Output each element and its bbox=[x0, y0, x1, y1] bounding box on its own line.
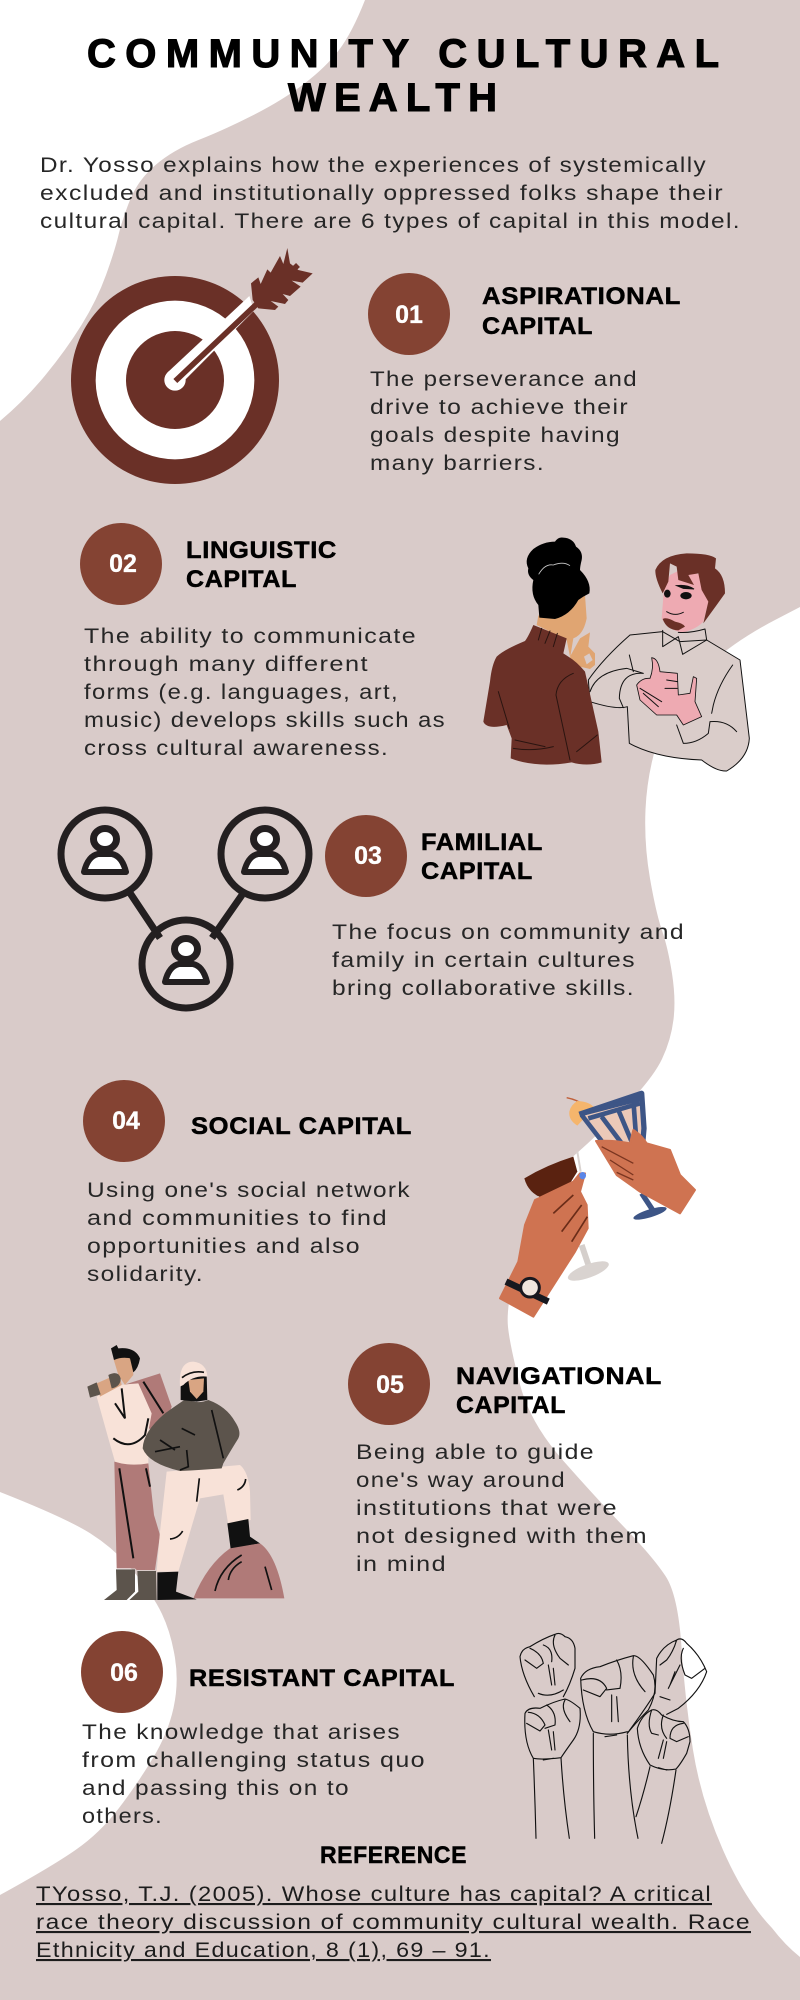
number badge 01 bbox=[368, 273, 450, 355]
heading 04: SOCIAL CAPITAL bbox=[191, 1113, 412, 1140]
number badge 06: 06 bbox=[110, 1659, 138, 1687]
heading 03: FAMILIAL bbox=[421, 829, 543, 856]
number badge 05: 05 bbox=[376, 1371, 404, 1399]
intro text block: cultural capital. There are 6 types of capital in this model. bbox=[40, 210, 741, 233]
section 06: resistant capital bbox=[81, 1631, 455, 1828]
illustration: hands toasting glasses bbox=[500, 1093, 695, 1317]
person icon left bbox=[84, 828, 126, 872]
body text 05: one's way around bbox=[356, 1469, 566, 1492]
body text 03: family in certain cultures bbox=[332, 949, 636, 972]
title: COMMUNITY CULTURAL bbox=[87, 32, 719, 76]
body text 01: goals despite having bbox=[370, 424, 621, 447]
body text 01: many barriers. bbox=[370, 452, 545, 475]
body text 04: and communities to find bbox=[87, 1207, 388, 1230]
intro text block: Dr. Yosso explains how the experiences of systemically bbox=[40, 154, 707, 177]
heading 01 bbox=[482, 283, 681, 340]
body text 04: Using one's social network bbox=[87, 1179, 411, 1202]
body text 04: solidarity. bbox=[87, 1263, 204, 1286]
body text 04 bbox=[87, 1179, 411, 1286]
person icon right bbox=[244, 828, 286, 872]
intro text block: excluded and institutionally oppressed folks shape their bbox=[40, 182, 724, 205]
number badge 05 bbox=[348, 1343, 430, 1425]
reference citation bbox=[36, 1883, 751, 1962]
heading 03 bbox=[421, 829, 543, 885]
illustration: two hikers bbox=[87, 1345, 284, 1600]
icon: connected people network bbox=[61, 810, 309, 1008]
heading 02: LINGUISTIC bbox=[186, 537, 337, 564]
person icon bottom bbox=[165, 938, 207, 982]
heading 05: NAVIGATIONAL bbox=[456, 1363, 662, 1390]
number badge 02: 02 bbox=[109, 550, 137, 578]
body text 06: from challenging status quo bbox=[82, 1749, 426, 1772]
number badge 03 bbox=[325, 815, 407, 897]
body text 02: music) develops skills such as bbox=[84, 709, 446, 732]
heading 01: CAPITAL bbox=[482, 313, 593, 340]
reference citation: race theory discussion of community cultural wealth. Race bbox=[36, 1911, 751, 1934]
body text 02: forms (e.g. languages, art, bbox=[84, 681, 399, 704]
body text 06: and passing this on to bbox=[82, 1777, 350, 1800]
heading 05 bbox=[456, 1363, 662, 1419]
title bbox=[87, 32, 719, 120]
body text 05: in mind bbox=[356, 1553, 447, 1576]
number badge 06 bbox=[81, 1631, 163, 1713]
section 03: familial capital bbox=[325, 815, 685, 1000]
body text 01 bbox=[370, 368, 638, 475]
number badge 02 bbox=[80, 523, 162, 605]
body text 01: The perseverance and bbox=[370, 368, 638, 391]
number badge 04: 04 bbox=[112, 1107, 140, 1135]
number badge 01: 01 bbox=[395, 301, 423, 329]
illustration: two people talking bbox=[483, 537, 749, 771]
body text 05: Being able to guide bbox=[356, 1441, 595, 1464]
reference citation: TYosso, T.J. (2005). Whose culture has capital? A critical bbox=[36, 1883, 712, 1906]
number badge 04 bbox=[83, 1080, 165, 1162]
section 05: navigational capital bbox=[348, 1343, 662, 1576]
body text 03 bbox=[332, 921, 685, 1000]
body text 05: institutions that were bbox=[356, 1497, 618, 1520]
section 01: aspirational capital bbox=[368, 273, 681, 475]
reference heading: REFERENCE bbox=[320, 1842, 467, 1869]
body text 05: not designed with them bbox=[356, 1525, 648, 1548]
body text 04: opportunities and also bbox=[87, 1235, 361, 1258]
illustration: raised fists bbox=[520, 1633, 707, 1843]
body text 06: others. bbox=[82, 1805, 163, 1828]
body text 05 bbox=[356, 1441, 648, 1576]
heading 03: CAPITAL bbox=[421, 858, 533, 885]
body text 02: through many different bbox=[84, 653, 369, 676]
body text 02: The ability to communicate bbox=[84, 625, 417, 648]
intro text block bbox=[40, 154, 741, 233]
heading 02: CAPITAL bbox=[186, 566, 297, 593]
body text 03: bring collaborative skills. bbox=[332, 977, 635, 1000]
body text 01: drive to achieve their bbox=[370, 396, 629, 419]
heading 01: ASPIRATIONAL bbox=[482, 283, 681, 310]
reference citation: Ethnicity and Education, 8 (1), 69 – 91. bbox=[36, 1939, 491, 1962]
number badge 03: 03 bbox=[354, 842, 382, 870]
icon: target with arrow bbox=[71, 248, 313, 484]
body text 06 bbox=[82, 1721, 426, 1828]
title: WEALTH bbox=[288, 76, 497, 120]
white blob: right side bbox=[508, 607, 800, 1957]
section 04: social capital bbox=[83, 1080, 412, 1286]
heading 02 bbox=[186, 537, 337, 593]
white blob: top left bbox=[0, 0, 365, 421]
body text 02: cross cultural awareness. bbox=[84, 737, 389, 760]
body text 02 bbox=[84, 625, 446, 760]
heading 05: CAPITAL bbox=[456, 1392, 566, 1419]
section 02: linguistic capital bbox=[80, 523, 446, 760]
body text 03: The focus on community and bbox=[332, 921, 685, 944]
white blob: bottom left bbox=[0, 1492, 177, 1895]
body text 06: The knowledge that arises bbox=[82, 1721, 401, 1744]
heading 06: RESISTANT CAPITAL bbox=[189, 1665, 455, 1692]
